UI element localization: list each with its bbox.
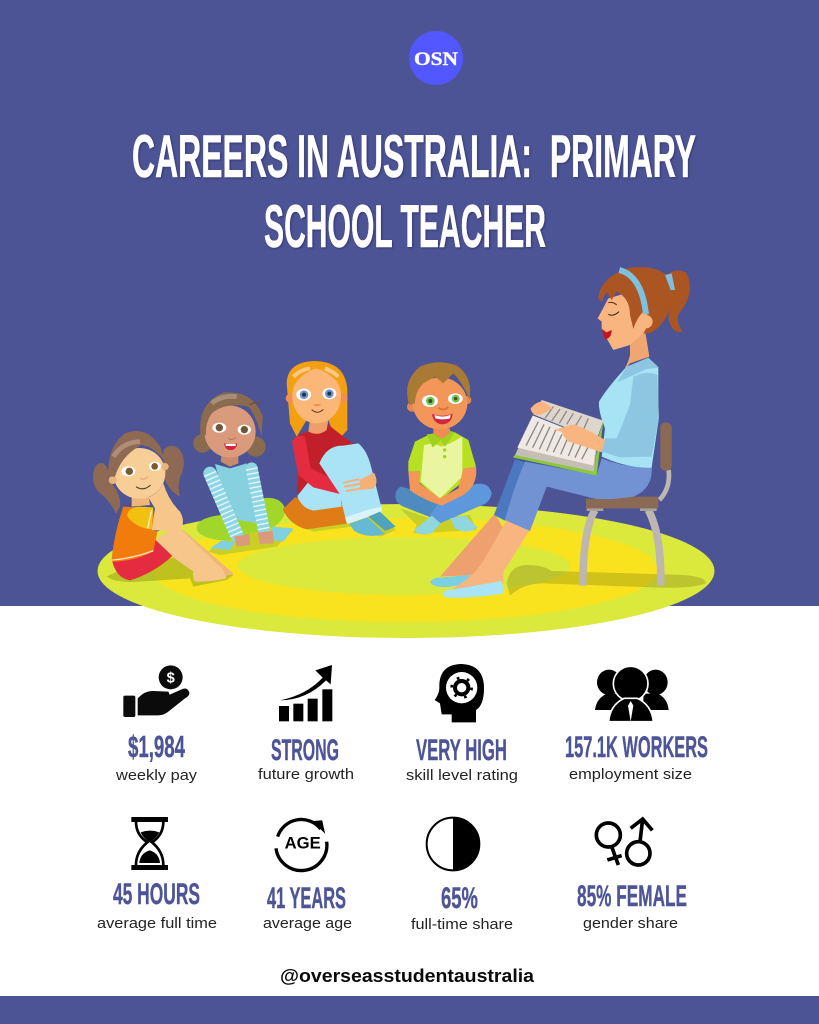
- footer band: [0, 996, 819, 1024]
- stat: employment size: employment size: [569, 766, 692, 783]
- header background: [0, 0, 819, 606]
- stat: average age: average age: [263, 915, 352, 932]
- illustration: teacher reading to children on a rug: [93, 267, 714, 638]
- stat: weekly pay: [115, 665, 198, 784]
- stat: skill level: [406, 664, 518, 784]
- stat: full-time share: full-time share: [411, 916, 513, 933]
- stat: future growth: STRONG: [271, 734, 339, 767]
- boy: [395, 362, 492, 534]
- stat: average age: 41 YEARS: [267, 882, 346, 915]
- stat: average full time: [97, 817, 217, 932]
- stat: weekly pay: weekly pay: [115, 767, 198, 784]
- stat: skill level: VERY HIGH: [416, 734, 507, 767]
- stat: full-time share: 65%: [441, 882, 478, 915]
- icon: head with gear: [435, 664, 484, 722]
- icon: hourglass: [131, 817, 168, 870]
- girl with short brown hair: [193, 392, 293, 555]
- icon: hand with coin: $: [167, 671, 175, 687]
- icon: half circle: [427, 818, 479, 870]
- stat: skill level: skill level rating: [406, 767, 518, 784]
- icon: rising bar chart: [279, 665, 332, 721]
- logo: [409, 31, 463, 85]
- title: [132, 123, 696, 260]
- icon: three people: [595, 666, 669, 722]
- social handle: @overseasstudentaustralia: [280, 966, 535, 986]
- rug: [98, 504, 714, 638]
- girl with blonde hair: [283, 361, 396, 537]
- stat: future growth: future growth: [258, 766, 354, 783]
- stat: future growth: [258, 665, 354, 783]
- stat: employment size: 157.1K WORKERS: [565, 731, 708, 764]
- stat: gender share: [577, 819, 687, 932]
- teacher: [430, 267, 690, 598]
- stat: gender share: 85% FEMALE: [577, 880, 687, 913]
- stat: gender share: gender share: [583, 915, 678, 932]
- stat: weekly pay: $1,984: [128, 729, 185, 764]
- title: SCHOOL TEACHER: [264, 193, 546, 260]
- girl with pigtails: [93, 431, 234, 587]
- icon: age circular arrow: AGE: [285, 833, 321, 852]
- stat: employment size: [565, 666, 708, 783]
- stat: average age: [263, 819, 352, 932]
- logo: OSN: [414, 49, 458, 70]
- stat: average full time: average full time: [97, 915, 217, 932]
- chair: [507, 422, 706, 596]
- stat: average full time: 45 HOURS: [113, 878, 200, 911]
- stat: full-time share: [411, 818, 513, 933]
- icon: gender symbols: [596, 819, 652, 865]
